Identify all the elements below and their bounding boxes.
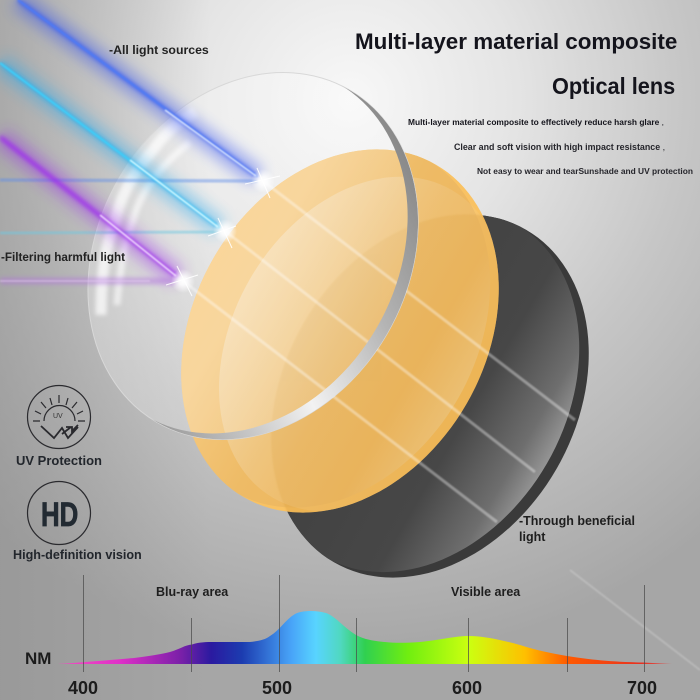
light beam: blue (0, 0, 280, 198)
label: UV protection: UV Protection (16, 453, 102, 468)
light beam: purple (0, 137, 198, 296)
label: high-definition vision: High-definition vision (13, 548, 142, 562)
clear lens (88, 72, 419, 440)
label: filtering harmful light: -Filtering harmful light (1, 251, 125, 264)
white light beams through the lenses (183, 181, 575, 522)
axis label: 500: 500 (262, 678, 292, 698)
axis label: 700: 700 (627, 678, 657, 698)
axis label: NM: NM (25, 649, 51, 668)
spectrum chart (58, 575, 672, 672)
title line 1: Multi-layer material composite (355, 29, 677, 54)
label: through beneficial light: -Through beneficial (519, 514, 635, 528)
axis label: 600: 600 (452, 678, 482, 698)
UV icon text: UV (53, 413, 63, 420)
clear lens rim (152, 86, 418, 440)
black lens (287, 215, 589, 578)
label: all light sources: -All light sources (109, 43, 209, 57)
icon: HD (28, 482, 90, 544)
label: Visible area: Visible area (451, 585, 520, 599)
description line 3: Not easy to wear and tearSunshade and UV protection (477, 166, 693, 176)
icon: UV protection (28, 386, 90, 448)
diagonal background light streak (570, 570, 700, 670)
label: through beneficial light: light (519, 530, 545, 544)
light beam: cyan (0, 63, 237, 248)
orange lens (181, 149, 499, 513)
description line 2: Clear and soft vision with high impact resistance , (454, 142, 665, 152)
HD icon text: HD (41, 496, 78, 534)
label: Blu-ray area: Blu-ray area (156, 585, 228, 599)
label: through beneficial light (519, 514, 635, 544)
title line 2: Optical lens (552, 73, 675, 99)
description line 1: Multi-layer material composite to effectively reduce harsh glare , (408, 117, 664, 127)
axis label: 400: 400 (68, 678, 98, 698)
